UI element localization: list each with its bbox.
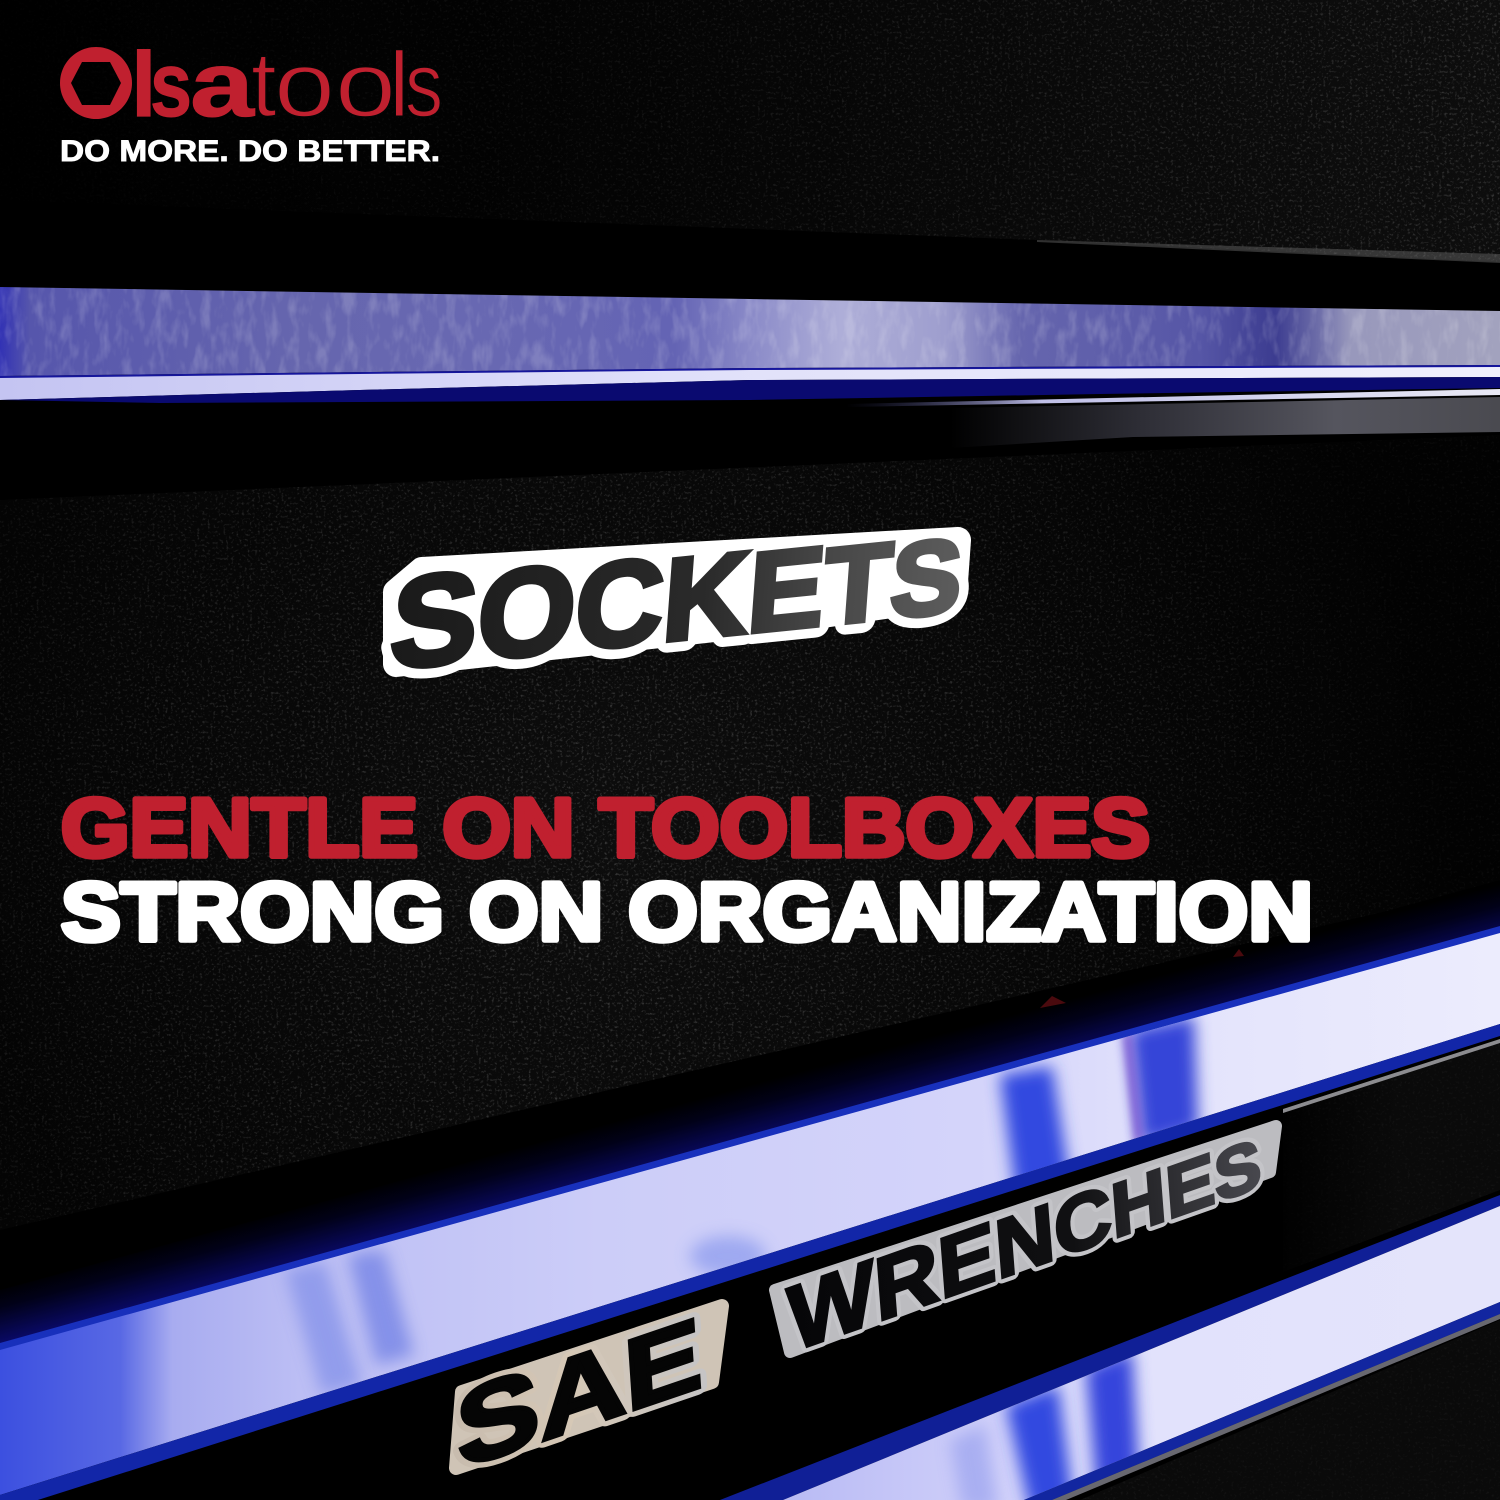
panel: bottom right corner	[1080, 1320, 1500, 1500]
badge plate	[396, 540, 958, 664]
top blue drawer rail	[0, 280, 1500, 448]
WRENCHES label	[775, 1104, 1276, 1371]
logo wordmark light part: t	[251, 34, 277, 136]
SAE plate	[456, 1306, 722, 1468]
headline line 2: STRONG ON ORGANIZATION	[61, 865, 1313, 958]
logo	[60, 34, 443, 168]
logo wordmark bold part: l	[131, 34, 157, 136]
logo wordmark bold part: a	[190, 34, 255, 136]
navy underside of lower drawer	[0, 880, 1500, 1350]
icon: hex socket O	[60, 47, 132, 119]
WRENCHES outline: WRENCHES	[785, 1104, 1264, 1371]
panel: upper drawer face	[0, 0, 1500, 262]
panel: main drawer face	[0, 435, 1500, 1230]
badge word: SOCKETS	[386, 494, 968, 697]
badge lettering	[386, 494, 968, 697]
tagline: DO MORE. DO BETTER.	[60, 135, 440, 168]
red reflections near the headline	[1040, 949, 1244, 1008]
panel: label strip textured end	[1283, 1042, 1500, 1272]
logo wordmark light part: s	[405, 34, 443, 136]
badge outline: SOCKETS	[386, 494, 968, 697]
headline	[61, 781, 1313, 958]
bottom blue drawer rail	[720, 1195, 1500, 1500]
logo wordmark light part: l	[389, 34, 409, 136]
rail reflections	[285, 1016, 1198, 1395]
label strip fade	[1270, 1070, 1400, 1280]
WRENCHES lettering	[785, 1104, 1264, 1371]
lower blue drawer rail	[0, 926, 1500, 1500]
logo wordmark light part: oo	[274, 34, 396, 136]
logo wordmark bold part: s	[150, 34, 192, 136]
SAE label	[453, 1289, 722, 1492]
headline line 1: GENTLE ON TOOLBOXES	[61, 781, 1150, 874]
upper drawer lit edge	[1037, 240, 1500, 263]
SAE outline: SAE	[453, 1289, 705, 1492]
rail reflections	[950, 1350, 1140, 1500]
sockets badge	[386, 494, 968, 697]
WRENCHES plate	[775, 1126, 1276, 1352]
SAE lettering	[453, 1289, 705, 1492]
SAE word: SAE	[453, 1289, 705, 1492]
WRENCHES word: WRENCHES	[785, 1104, 1264, 1371]
